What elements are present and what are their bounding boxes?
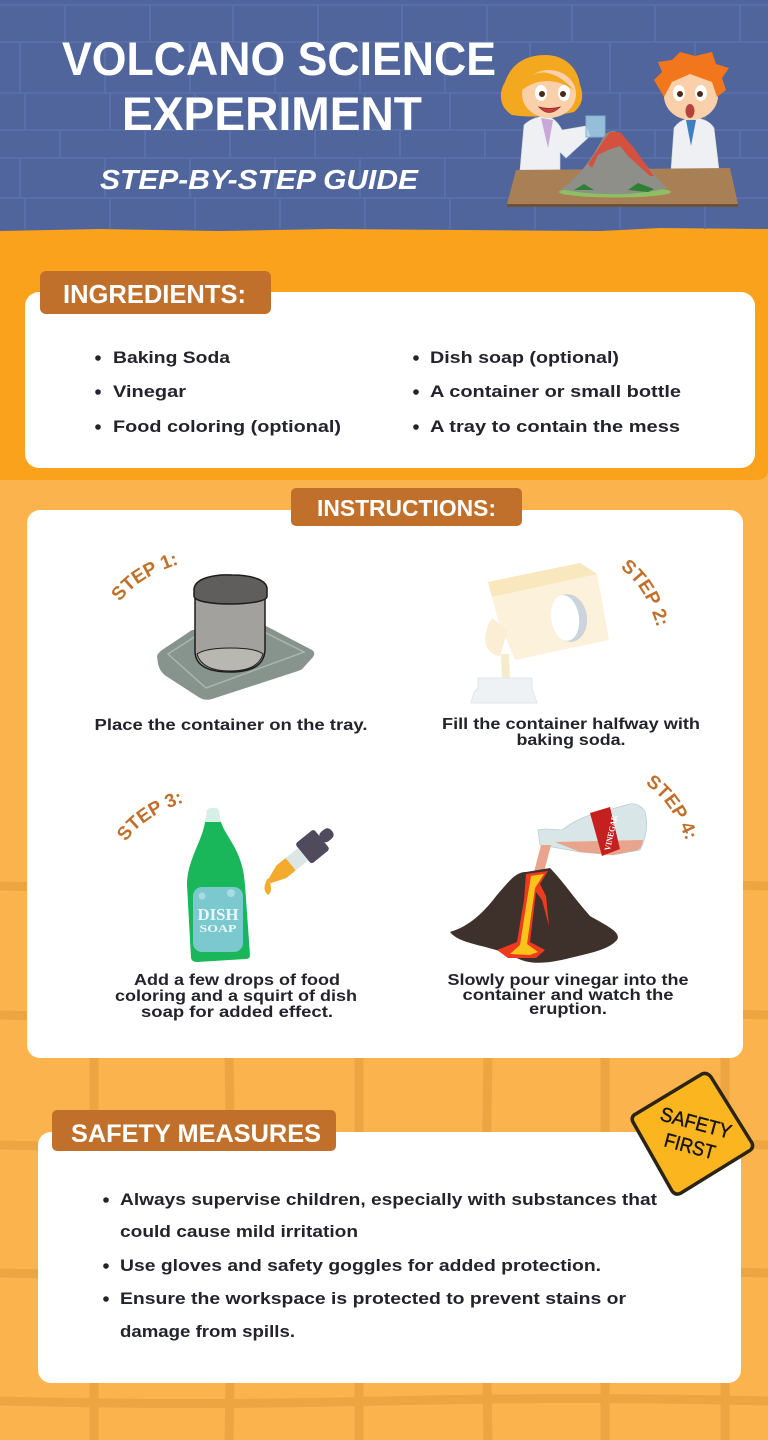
safety list: Ensure the workspace is protected to prevent stains or [120,1290,627,1308]
heading: ingredients [40,271,271,314]
ingredients list: right column: A container or small bottle [430,383,681,401]
panel: ingredients [25,271,755,468]
ingredients list: left column: Baking Soda [113,349,231,367]
ingredients list: left column: Vinegar [113,383,187,401]
step 3: coloring and a squirt of dish [115,988,357,1005]
step 3 [115,794,357,1021]
header: blue brick wall [0,0,768,231]
icon: safety first sign [632,1073,753,1194]
heading: safety measures [52,1110,336,1151]
step 1 label: STEP 1: [112,555,178,600]
icon: baking soda box pouring [471,563,609,703]
safety list: could cause mild irritation [120,1223,358,1241]
step 3 label: STEP 3: [118,794,182,840]
step 4 label: STEP 4: [647,776,696,840]
girl [501,55,590,170]
step 4 caption: Slowly pour vinegar into the [448,972,689,989]
icon: vinegar bottle pouring: VINEGAR [602,813,620,851]
icon: dish soap bottle: DISH [198,905,238,924]
icon: erupting volcano [450,868,618,963]
step 3 caption: Add a few drops of food [134,972,340,989]
panel: safety measures [38,1073,753,1383]
icon: dish soap bottle: SOAP [200,923,237,935]
icon: container on tray [157,575,314,700]
panel: ingredients backdrop band [0,228,768,480]
heading: ingredients: INGREDIENTS: [63,279,246,309]
heading: instructions [291,488,522,526]
illustration: children with volcano model [501,52,738,207]
title [62,32,496,140]
heading: instructions: INSTRUCTIONS: [317,495,496,521]
volcano model [559,186,671,198]
safety list [103,1191,658,1341]
heading: safety measures: SAFETY MEASURES [71,1120,321,1148]
step 2 [442,560,700,749]
beaker [586,116,605,137]
step 4: container and watch the [462,987,674,1004]
ingredients list: right column: A tray to contain the mess [430,418,680,436]
icon: dish soap bottle [187,808,250,962]
safety list: Use gloves and safety goggles for added protection. [120,1257,601,1275]
table [507,168,738,204]
icon: safety first sign: SAFETY [658,1104,734,1144]
step 1 [94,555,368,734]
step 4 [448,776,696,1018]
subtitle: STEP-BY-STEP GUIDE [100,164,419,195]
title: EXPERIMENT [122,87,422,140]
step 3: soap for added effect. [141,1004,333,1021]
boy [654,52,729,170]
ingredients list: right column [413,349,681,436]
safety list: damage from spills. [120,1323,295,1341]
ingredients list: right column: Dish soap (optional) [430,349,619,367]
step 2: baking soda. [516,732,626,749]
step 4: eruption. [529,1001,607,1018]
step 2 caption: Fill the container halfway with [442,716,700,733]
ingredients list: left column [95,349,341,436]
icon: food coloring drop [264,878,271,895]
panel: instructions [27,488,743,1058]
step 2 label: STEP 2: [622,560,666,626]
icon: safety first sign: FIRST [662,1130,718,1164]
ingredients list: left column: Food coloring (optional) [113,418,341,436]
title: VOLCANO SCIENCE [62,32,496,85]
safety list: Always supervise children, especially with substances that [120,1191,658,1209]
icon: vinegar bottle pouring [534,804,647,872]
icon: food coloring dropper [261,821,340,892]
step 1 caption: Place the container on the tray. [94,717,368,734]
